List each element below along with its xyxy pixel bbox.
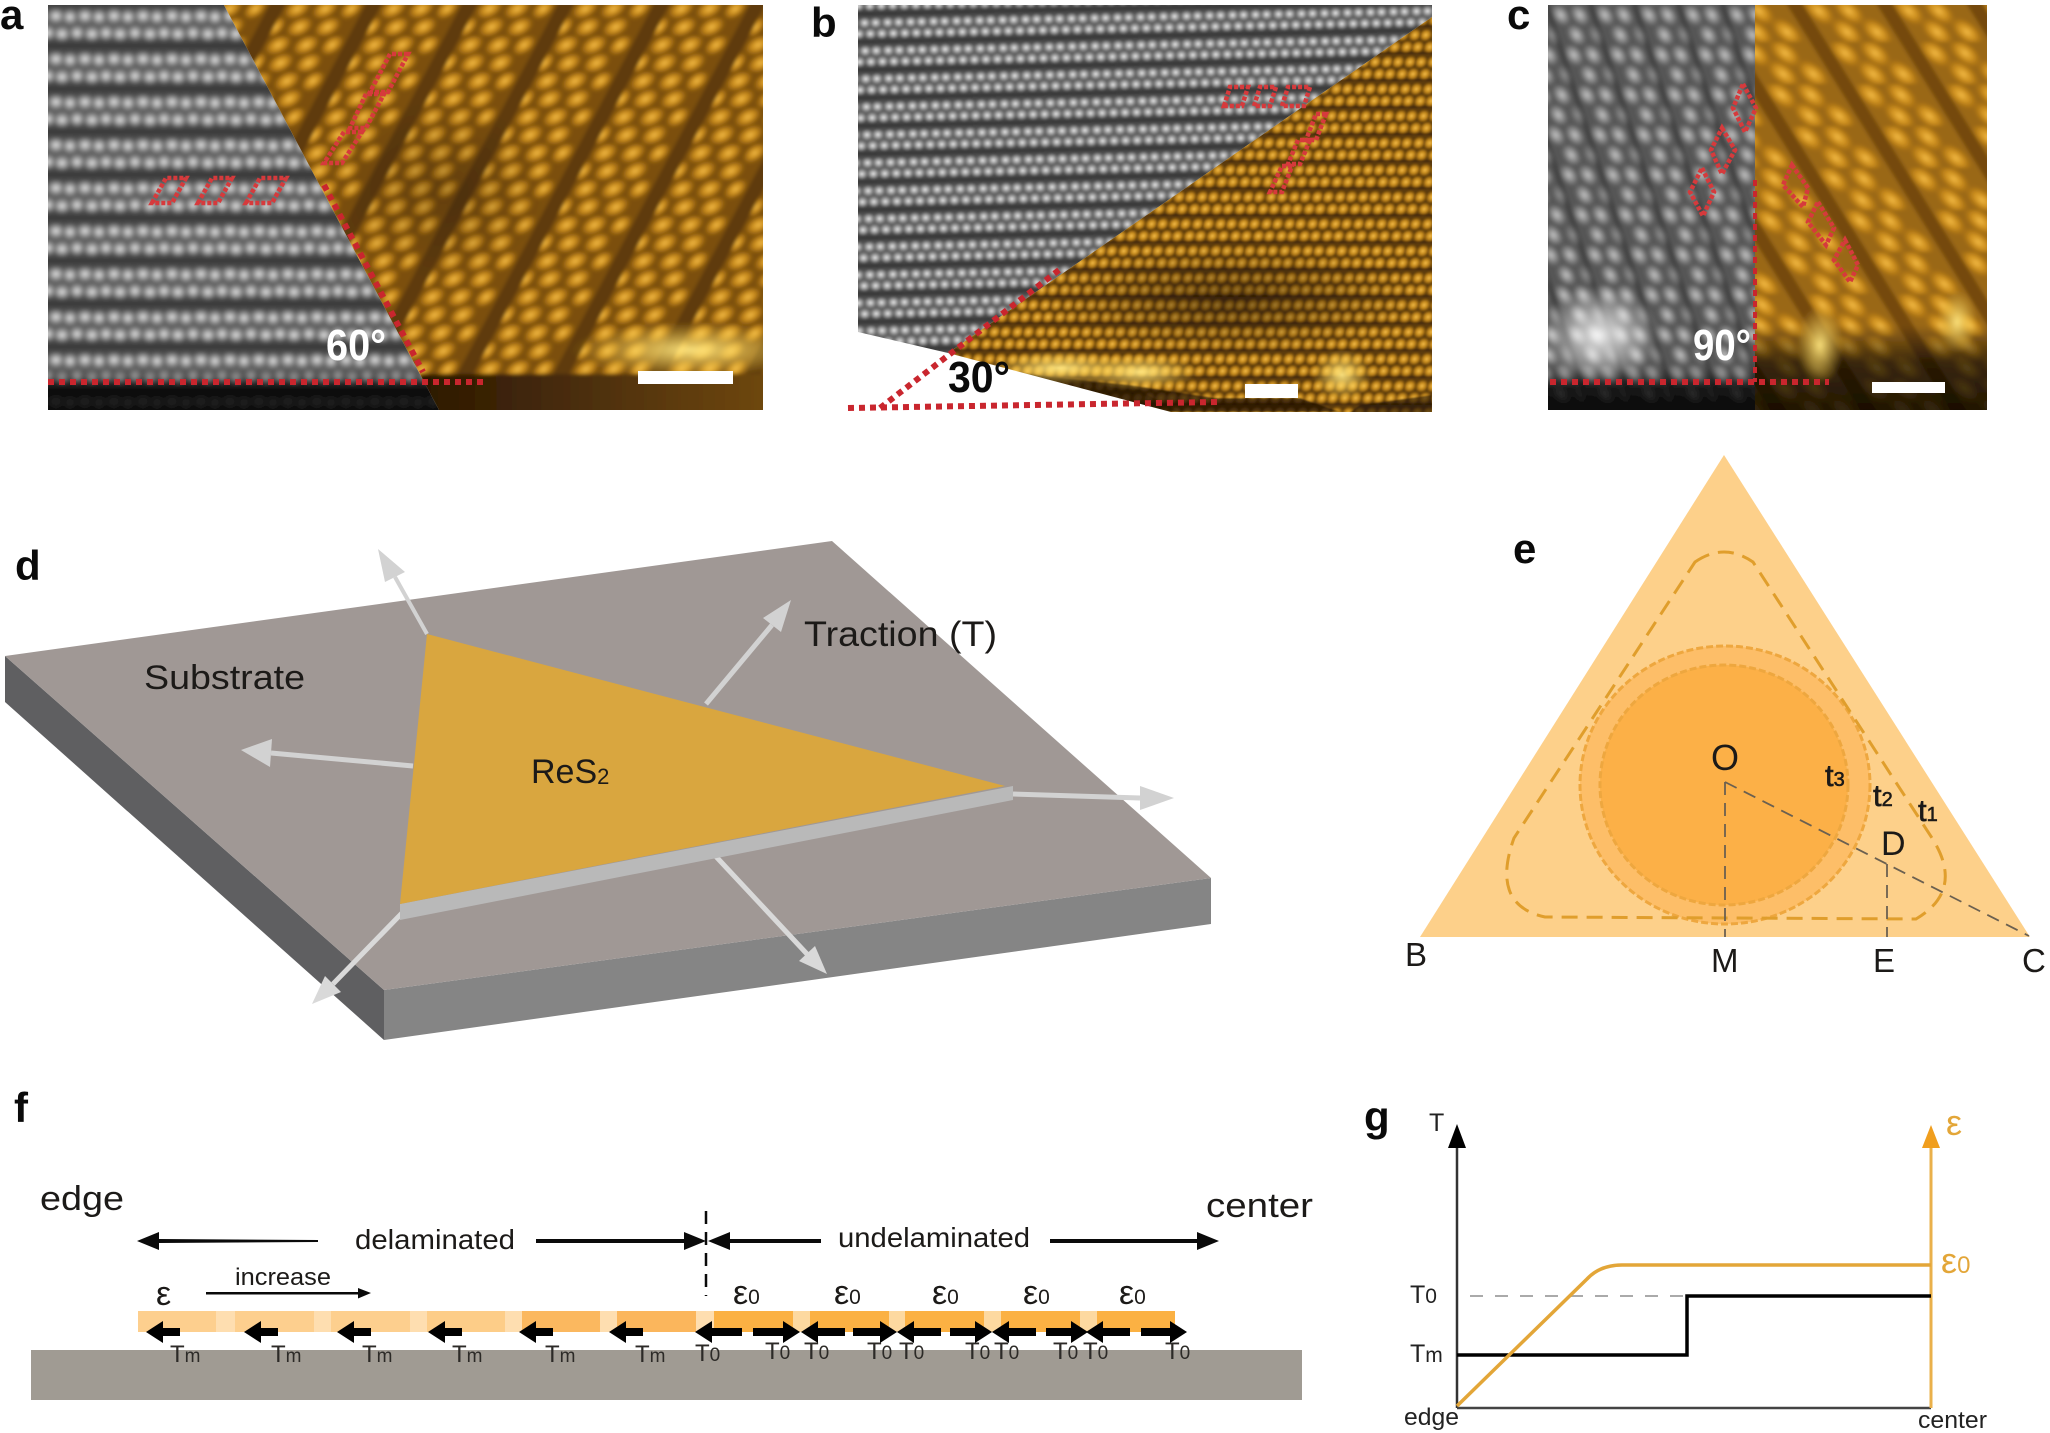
point and thickness labels: M <box>1711 942 1738 979</box>
label f: f <box>14 1084 29 1131</box>
point and thickness labels <box>1405 737 2046 979</box>
boundary dotted lines b <box>848 270 1219 408</box>
panel b: STEM image with 30 degree boundary <box>845 0 1445 420</box>
label b: b <box>811 0 837 46</box>
point and thickness labels: B <box>1405 936 1427 973</box>
right axis strain <box>1922 1125 1940 1408</box>
undelaminated label: undelaminated <box>838 1222 1030 1253</box>
traction labels: T0 <box>695 1340 720 1367</box>
increase label: increase <box>235 1264 331 1291</box>
substrate right side <box>384 878 1211 1040</box>
arrow: traction left <box>241 739 413 767</box>
panel d: substrate slab with ReS2 triangle <box>5 541 1211 1040</box>
traction labels: T0 <box>1053 1338 1078 1365</box>
point and thickness labels: E <box>1873 942 1895 979</box>
traction labels: Tm <box>170 1341 200 1368</box>
substrate label: Substrate <box>144 659 305 697</box>
point and thickness labels: C <box>2022 942 2046 979</box>
delaminated range arrows <box>137 1232 706 1250</box>
strain labels <box>733 1274 1146 1312</box>
traction labels: Tm <box>545 1341 576 1368</box>
point and thickness labels: O <box>1711 737 1739 778</box>
boundary dotted lines c <box>1550 180 1829 382</box>
strain labels g: ε0 <box>1941 1240 1970 1281</box>
point and thickness labels: D <box>1881 825 1906 863</box>
inner circle t3 <box>1600 665 1848 905</box>
chart labels: T0 <box>1410 1281 1437 1309</box>
traction labels: T0 <box>965 1338 990 1365</box>
orange lattice grain b <box>930 5 1440 420</box>
traction labels: Tm <box>271 1341 302 1368</box>
chart labels: T <box>1429 1109 1444 1137</box>
strain labels g: ε <box>1946 1102 1962 1143</box>
red lattice motif orange c <box>1783 165 1858 282</box>
arrow: traction right <box>1013 786 1174 810</box>
orange lattice grain a <box>224 5 763 410</box>
strain labels: ε0 <box>932 1274 959 1312</box>
dashed rounded triangle t1 <box>1507 552 1945 919</box>
grey lattice grain c <box>1548 5 1755 410</box>
strain labels: ε0 <box>733 1274 760 1312</box>
panel e: triangle diagram with thickness zones <box>1405 455 2046 979</box>
panel c: STEM image with 90 degree boundary <box>1530 0 2000 420</box>
red lattice motif grey b <box>1224 87 1310 106</box>
scale bar a <box>638 371 733 384</box>
outer circle t2 <box>1580 646 1870 924</box>
traction labels: T0 <box>899 1338 924 1365</box>
arrow: traction up <box>378 549 427 634</box>
ReS2 label: 2 <box>597 764 609 789</box>
red lattice motif orange b <box>1270 114 1326 192</box>
scale bar c <box>1872 382 1945 393</box>
layer strip segments <box>138 1311 1175 1332</box>
traction labels: T0 <box>994 1338 1019 1365</box>
traction labels: Tm <box>362 1341 392 1368</box>
delaminated label: delaminated <box>355 1224 515 1255</box>
boundary dotted lines a <box>48 185 487 382</box>
point and thickness labels: t2 <box>1873 778 1893 813</box>
left axis T <box>1448 1124 1466 1408</box>
strain curve <box>1457 1265 1931 1406</box>
substrate bar <box>31 1350 1302 1400</box>
chart labels: Tm <box>1410 1340 1443 1368</box>
scale bar b <box>1245 384 1298 398</box>
strain labels: ε0 <box>1023 1274 1050 1312</box>
substrate left side <box>5 656 384 1040</box>
panel g: traction and strain chart <box>1404 1102 1987 1433</box>
arrow: traction lower left <box>312 912 403 1004</box>
construction lines <box>1725 782 2029 937</box>
red lattice motif grey a <box>152 178 286 203</box>
traction labels: T0 <box>1165 1338 1190 1365</box>
T0 dashed guide <box>1470 1295 1687 1297</box>
center label: center <box>1206 1187 1313 1225</box>
label d: d <box>15 542 41 589</box>
strain labels: ε0 <box>1119 1274 1146 1312</box>
red lattice motif grey c <box>1690 84 1756 216</box>
label e: e <box>1513 525 1536 572</box>
edge label: edge <box>40 1180 124 1218</box>
panel f: edge to center cross-section <box>31 1180 1313 1400</box>
ReS2 label: ReS <box>531 753 597 791</box>
increase arrow <box>206 1288 371 1298</box>
traction labels <box>170 1338 1190 1368</box>
ReS2 triangle <box>400 634 1005 904</box>
traction labels: T0 <box>804 1338 829 1365</box>
traction step curve <box>1457 1296 1931 1355</box>
traction labels: Tm <box>452 1341 482 1368</box>
chart labels: edge <box>1404 1404 1459 1431</box>
panel a: STEM image with 60 degree boundary <box>48 5 763 410</box>
traction labels: T0 <box>765 1338 790 1365</box>
traction label: Traction (T) <box>804 615 997 654</box>
undelaminated range arrows <box>708 1232 1219 1250</box>
outer triangle <box>1420 455 2030 937</box>
triangle thickness edge <box>400 786 1013 920</box>
substrate top <box>5 541 1211 990</box>
angle label 30: 30° <box>948 353 1010 402</box>
strain symbol: ε <box>156 1275 171 1313</box>
angle label 60: 60° <box>326 321 386 370</box>
dashed divider <box>705 1211 707 1296</box>
traction labels: T0 <box>867 1338 892 1365</box>
angle label 90: 90° <box>1693 321 1751 370</box>
arrow: traction lower right <box>708 848 827 974</box>
point and thickness labels: t1 <box>1918 793 1938 828</box>
grey lattice grain a <box>48 5 439 410</box>
traction labels: Tm <box>635 1341 666 1368</box>
chart labels <box>1404 1109 1987 1433</box>
traction labels: T0 <box>1083 1338 1108 1365</box>
traction arrows <box>146 1321 1187 1343</box>
arrow: traction upper right <box>706 600 791 704</box>
bottom axis <box>1457 1407 1931 1409</box>
label g: g <box>1364 1093 1390 1140</box>
strain labels g <box>1941 1102 1970 1281</box>
orange lattice grain c <box>1755 5 1987 410</box>
strain labels: ε0 <box>834 1274 861 1312</box>
grey lattice grain b <box>845 0 1445 365</box>
point and thickness labels: t3 <box>1825 758 1845 793</box>
red lattice motif orange a <box>324 54 408 163</box>
